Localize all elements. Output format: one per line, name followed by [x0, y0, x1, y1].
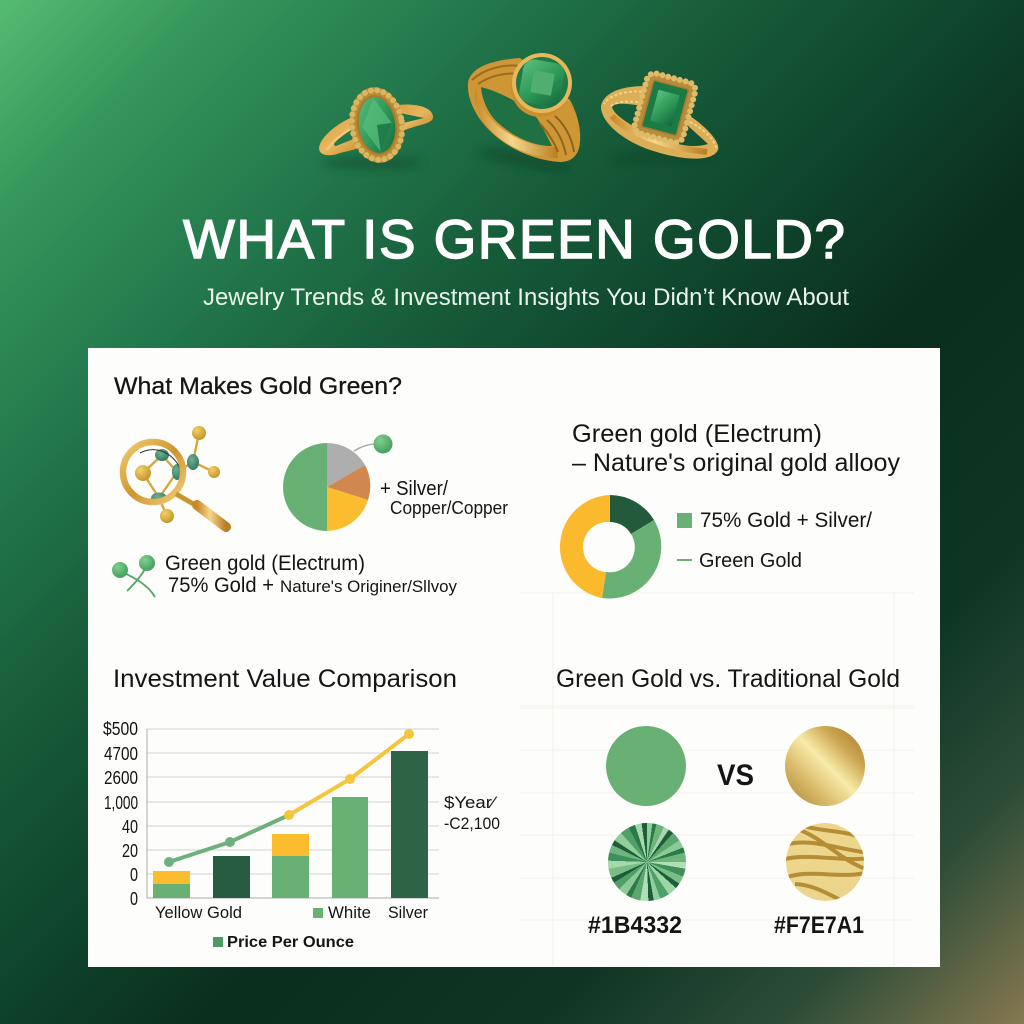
vs label: VS [717, 759, 754, 792]
icon: round gem ring [468, 53, 580, 173]
donut legend: Green Gold [699, 549, 802, 572]
y-axis labels: 2600 [104, 768, 138, 788]
icon: two green atoms [112, 555, 155, 597]
donut legend: 75% Gold + Silver/ [700, 509, 872, 532]
icon: oval gem ring [319, 84, 433, 168]
donut chart [560, 495, 661, 599]
swatch: flat green [606, 726, 686, 806]
chart side note: -C2,100 [444, 814, 500, 833]
y-axis labels: 1,000 [104, 793, 138, 813]
chart side note: $Year⁄ [444, 793, 498, 812]
icon: magnifier over molecule [123, 426, 226, 527]
icon: emerald cut gem ring [601, 72, 718, 162]
heading: investment value comparison: Investment Value Comparison [113, 665, 457, 693]
y-axis labels: 0 [130, 865, 138, 885]
pie chart: alloy composition [283, 434, 392, 531]
label: green hex code: #1B4332 [588, 912, 682, 939]
y-axis labels: 40 [122, 817, 138, 837]
pie label [380, 478, 508, 518]
chart category labels: Yellow Gold [155, 904, 242, 922]
y-axis labels: $500 [103, 719, 138, 739]
heading: green gold vs traditional gold: Green Gold vs. Traditional Gold [556, 665, 900, 693]
swatch: gold texture [786, 823, 864, 901]
y-axis labels [103, 719, 138, 909]
y-axis labels: 20 [122, 841, 138, 861]
pie label: Copper/Copper [390, 498, 508, 518]
chart legend: Price Per Ounce [227, 934, 354, 951]
heading: electrum alloy: Green gold (Electrum) [572, 420, 822, 448]
icon: three gold rings with green gems [319, 53, 718, 173]
chart category labels: Silver [388, 904, 428, 922]
title: WHAT IS GREEN GOLD? [183, 208, 845, 270]
heading: electrum alloy [572, 420, 900, 477]
pie label: + Silver/ [380, 478, 448, 500]
donut legend [677, 509, 872, 572]
swatch: polished gold [785, 726, 865, 806]
bar and line chart: price per ounce [103, 719, 439, 909]
chart category labels [155, 904, 428, 922]
text: green gold electrum note [165, 552, 458, 597]
heading: what makes gold green: What Makes Gold Green? [114, 373, 402, 400]
y-axis labels: 4700 [104, 744, 138, 764]
chart side note [444, 793, 500, 833]
label: gold hex code: #F7E7A1 [774, 912, 864, 939]
heading: electrum alloy: – Nature's original gold allooy [572, 449, 900, 477]
decorative grid [520, 593, 914, 966]
text: green gold electrum note: 75% Gold + [168, 574, 274, 597]
panel: white content card [88, 348, 940, 967]
swatch: green sunburst [608, 823, 686, 901]
chart category labels: White [328, 904, 371, 922]
y-axis labels: 0 [130, 889, 138, 909]
text: green gold electrum note: Nature's Originer/Sllvoy [280, 578, 458, 596]
subtitle: Jewelry Trends & Investment Insights You Didn’t Know About [203, 284, 849, 311]
text: green gold electrum note: Green gold (Electrum) [165, 552, 365, 575]
